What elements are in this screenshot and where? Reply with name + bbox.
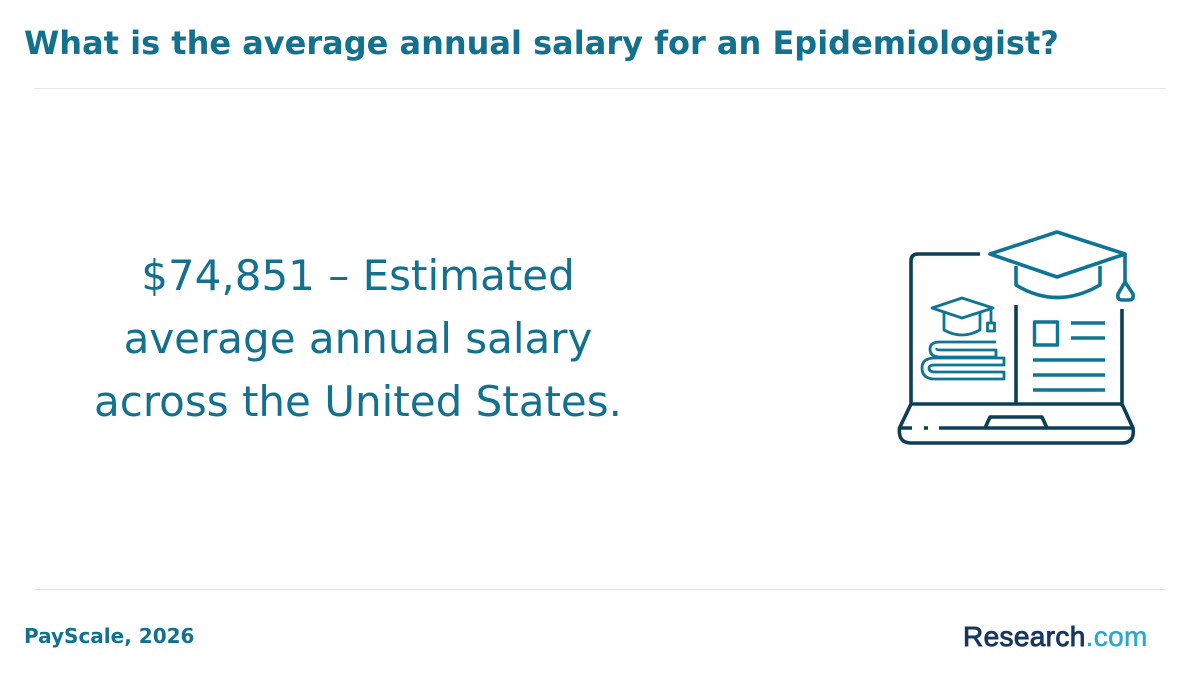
source: PayScale, 2026 xyxy=(24,624,194,648)
laptop frame xyxy=(899,254,1133,443)
salary statement: average annual salary xyxy=(124,314,592,363)
document lines xyxy=(1033,322,1105,390)
salary statement: $74,851 – Estimated xyxy=(141,251,575,300)
logo: Research.com xyxy=(963,621,1148,652)
icon: laptop with graduation cap xyxy=(898,230,1136,445)
large graduation cap xyxy=(990,232,1133,300)
salary statement xyxy=(94,251,622,426)
title: What is the average annual salary for an Epidemiologist? xyxy=(24,24,1059,62)
salary statement: across the United States. xyxy=(94,377,622,426)
small cap and books xyxy=(922,298,1004,379)
